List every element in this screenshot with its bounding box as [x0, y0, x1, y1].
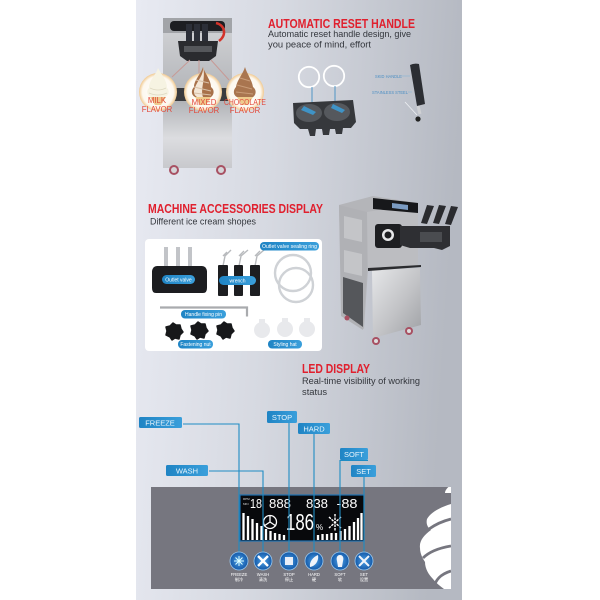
readout: top digits: -88 [336, 496, 358, 511]
led screen [240, 495, 364, 541]
panel: accessories card [145, 239, 322, 351]
accessory: styling hats [254, 318, 315, 348]
grip handle: STAINLESS STEEL [372, 90, 408, 95]
button: hard: HARD [308, 572, 320, 577]
flavor: chocolate [224, 67, 266, 115]
icon: snow [329, 514, 341, 531]
flavor: milk: FLAVOR [142, 105, 173, 114]
background panel [136, 0, 462, 600]
text: led description: status [302, 386, 327, 397]
callout: freeze: FREEZE [145, 418, 175, 428]
callout: hard: HARD [303, 424, 325, 434]
readout: top digits [243, 496, 358, 511]
accessory: wrench [218, 250, 264, 296]
accessory: styling hats: Styling hat [273, 342, 297, 348]
button: stop [280, 552, 298, 583]
grip handle [372, 64, 425, 122]
button: set [355, 552, 373, 583]
accessory: handle fixing pin [160, 308, 247, 318]
callout: soft: SOFT [344, 450, 364, 459]
flavor: mixed [184, 67, 222, 115]
text: automatic reset description: Automatic reset handle design, give [268, 28, 411, 39]
button: wash [254, 552, 272, 583]
bar meter: right [318, 513, 362, 540]
text: automatic reset description: you peace of mind, effort [268, 38, 371, 50]
callout: stop [267, 411, 297, 423]
flavor: mixed: FLAVOR [189, 106, 220, 115]
callout: wash [166, 465, 208, 476]
button: stop: 停止 [285, 576, 293, 583]
readout: percent sign: % [316, 523, 323, 532]
flavor: milk [139, 68, 177, 114]
heading: automatic reset handle: AUTOMATIC RESET HANDLE [268, 16, 415, 31]
grip handle: SKID HANDLE [375, 74, 402, 79]
label: fastening nut: Fastening nut [180, 342, 211, 348]
button: hard [305, 552, 323, 583]
button: soft [331, 552, 349, 583]
callout: hard [298, 423, 330, 434]
text: accessories subtitle: Different ice cream shopes [150, 216, 256, 226]
button: wash: WASH [257, 572, 269, 577]
readout: top digits: 888 [269, 496, 291, 511]
button: freeze [230, 552, 248, 583]
button: soft: SOFT [334, 572, 346, 577]
readout: top digits: MIN [243, 502, 248, 506]
callout: wash: WASH [176, 466, 198, 476]
handle block with rings [293, 66, 356, 136]
button: set: 设置 [360, 576, 368, 583]
button: hard: 硬 [312, 577, 317, 583]
button: wash: 清洗 [259, 576, 268, 583]
panel: control panel [151, 487, 451, 589]
button: stop: STOP [283, 572, 295, 577]
accessory: wrench: wrench [229, 278, 246, 284]
machine: perspective view [339, 196, 458, 345]
callout: set [351, 465, 376, 477]
callout: soft [340, 448, 368, 460]
callout lines [183, 423, 368, 552]
bar meter: left [244, 513, 284, 540]
button: freeze: 制冷 [235, 576, 243, 583]
accessory: sealing rings [260, 242, 319, 302]
accessory: outlet valve: Outlet valve [165, 278, 192, 284]
readout: top digits: 838 [306, 496, 328, 511]
heading: led display: LED DISPLAY [302, 361, 370, 376]
button: soft: 软 [338, 576, 343, 583]
callout: stop: STOP [272, 413, 292, 422]
flavor: milk: MILK [148, 96, 167, 105]
accessory: handle fixing pin: Handle fixing pin [185, 312, 222, 318]
accessory: outlet valve [152, 247, 207, 293]
callout: freeze [139, 417, 182, 428]
icon: cream swirl [420, 485, 451, 589]
text: led description: Real-time visibility of working [302, 375, 420, 386]
readout: top digits: 18 [250, 496, 262, 511]
machine with three flavors [163, 18, 232, 175]
callout: set: SET [356, 467, 371, 476]
accessory: sealing rings: Outlet valve sealing ring [262, 244, 317, 250]
icon: fan [264, 515, 276, 528]
flavor: mixed: MIXED [192, 98, 217, 107]
button: freeze: FREEZE [231, 572, 247, 577]
readout: big number: 186 [286, 509, 314, 535]
readout: top digits: RPM [243, 497, 250, 501]
accessory: fastening nuts [166, 322, 234, 340]
flavor: chocolate: CHOCOLATE [224, 98, 266, 107]
button: set: SET [360, 572, 369, 577]
label: fastening nut [178, 340, 213, 348]
flavor: chocolate: FLAVOR [230, 106, 261, 115]
heading: machine accessories: MACHINE ACCESSORIES DISPLAY [148, 201, 323, 216]
